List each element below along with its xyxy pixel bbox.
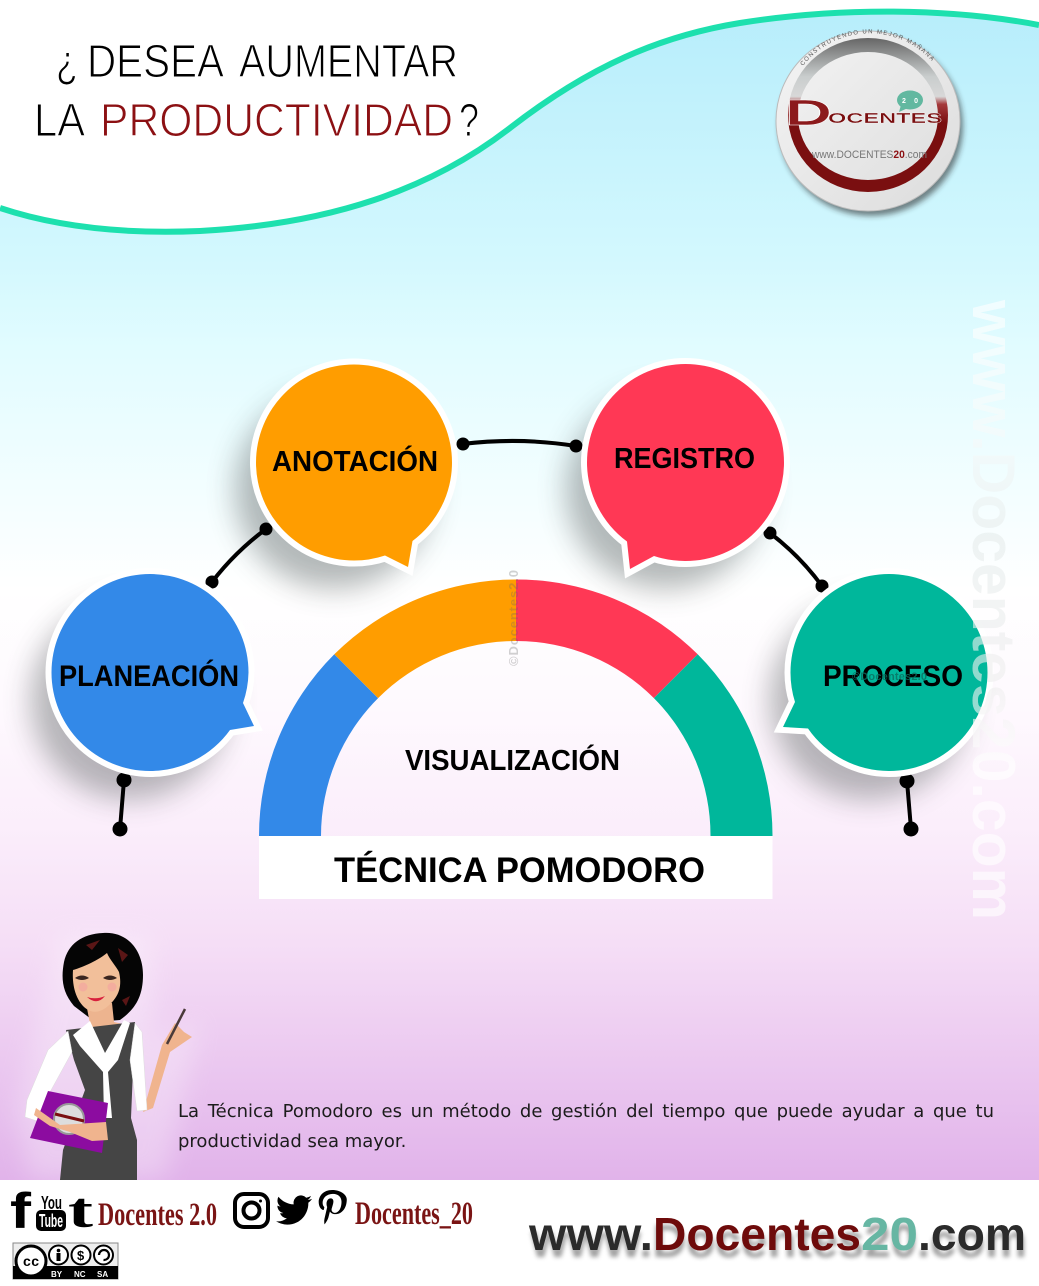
icon: pinterest (319, 1190, 347, 1224)
license badge: creative commons: $ (77, 1248, 85, 1263)
license badge: creative commons: NC (74, 1270, 86, 1279)
title: AUMENTAR (239, 35, 458, 87)
social icons: facebook youtube tumblr: You (41, 1193, 62, 1213)
left sleeve (25, 1031, 72, 1121)
logo: Docentes 2.0 badge: OCENTES (828, 110, 942, 127)
white header wave with green stroke (0, 0, 1039, 232)
bubble: planeación: PLANEACIÓN (59, 659, 239, 693)
social icons: facebook youtube tumblr: Tube (39, 1211, 63, 1231)
right sleeve (130, 1023, 147, 1111)
face (73, 953, 120, 1012)
label: visualización: VISUALIZACIÓN (405, 743, 620, 777)
title (34, 35, 479, 146)
license badge: creative commons: cc (23, 1253, 39, 1269)
website url: www.Docentes20.com (530, 1215, 1027, 1267)
footer background (0, 1180, 1039, 1286)
social icons: facebook youtube tumblr: f (10, 1183, 31, 1239)
eyes and mouth (75, 976, 117, 980)
shirt collar (73, 1020, 130, 1118)
license badge: creative commons: BY (51, 1270, 63, 1279)
folder badge (54, 1104, 84, 1134)
pencil (167, 1009, 185, 1044)
segment: teal (654, 654, 773, 836)
title: PRODUCTIVIDAD (100, 94, 453, 146)
bubble: planeación (52, 574, 254, 771)
bubble: anotación (256, 364, 452, 567)
folder (30, 1091, 108, 1153)
bubble: anotación: ANOTACIÓN (272, 444, 438, 478)
bubble: registro (587, 364, 784, 569)
website url: 20 (861, 1208, 918, 1260)
banner: técnica pomodoro: TÉCNICA POMODORO (334, 850, 705, 890)
connector: anotación to registro (456, 438, 582, 452)
bubble shadows (31, 391, 968, 799)
hair highlights (86, 940, 130, 1006)
connector: proceso bottom (900, 774, 918, 836)
arm over folder (34, 1108, 108, 1141)
segment: blue (259, 654, 378, 836)
segment: red (516, 579, 698, 698)
logo: Docentes 2.0 badge: 20 (902, 98, 918, 105)
icon: twitter (276, 1195, 312, 1225)
connector: registro to proceso (764, 526, 828, 592)
semicircle chart: técnica pomodoro (259, 579, 773, 836)
logo: Docentes 2.0 badge: CONSTRUYENDO UN MEJOR MAÑANA (800, 29, 934, 65)
bubble: proceso: ©Docentes2.0 (852, 671, 927, 683)
title: ¿ (56, 35, 78, 87)
bubble: proceso (783, 574, 988, 771)
body text (178, 1101, 994, 1152)
connector lines (112, 438, 918, 836)
license badge: creative commons (13, 1243, 118, 1279)
small vertical watermark: ©Docentes2.0 (506, 570, 521, 666)
vest and skirt (60, 1022, 137, 1180)
title: LA (34, 94, 85, 146)
social icons: facebook youtube tumblr (10, 1182, 94, 1239)
illustration: woman with folder (15, 933, 200, 1180)
website url: Docentes (653, 1208, 861, 1260)
license badge: creative commons: SA (97, 1270, 108, 1279)
neck (86, 1003, 123, 1053)
connector: planeación to anotación (206, 522, 272, 588)
title: ? (459, 94, 479, 146)
hair (63, 933, 143, 1022)
banner: técnica pomodoro (259, 836, 772, 899)
bubble: registro: REGISTRO (614, 443, 755, 475)
logo: Docentes 2.0 badge: D (785, 92, 832, 133)
vertical watermark: www.Docentes20.com (960, 299, 1027, 920)
logo: Docentes 2.0 badge: www.DOCENTES20.com (811, 149, 927, 161)
social icons: facebook youtube tumblr: t (68, 1182, 94, 1238)
icon: instagram (235, 1194, 268, 1227)
right arm and hand (143, 1023, 192, 1112)
body text: La Técnica Pomodoro es un método de gestión del tiempo que puede ayudar a que tu (178, 1101, 994, 1122)
title: DESEA (87, 35, 224, 87)
body text: productividad sea mayor. (178, 1131, 406, 1152)
connector: planeación bottom (112, 772, 132, 836)
handle: Docentes 2.0: Docentes 2.0 (98, 1197, 217, 1233)
handle: Docentes_20: Docentes_20 (355, 1196, 473, 1232)
glow (15, 935, 200, 1180)
bubble: proceso: PROCESO (823, 660, 963, 693)
website url: www. (528, 1208, 653, 1260)
segment: orange (334, 579, 516, 698)
website url: .com (918, 1208, 1026, 1260)
logo: Docentes 2.0 badge (775, 29, 967, 220)
